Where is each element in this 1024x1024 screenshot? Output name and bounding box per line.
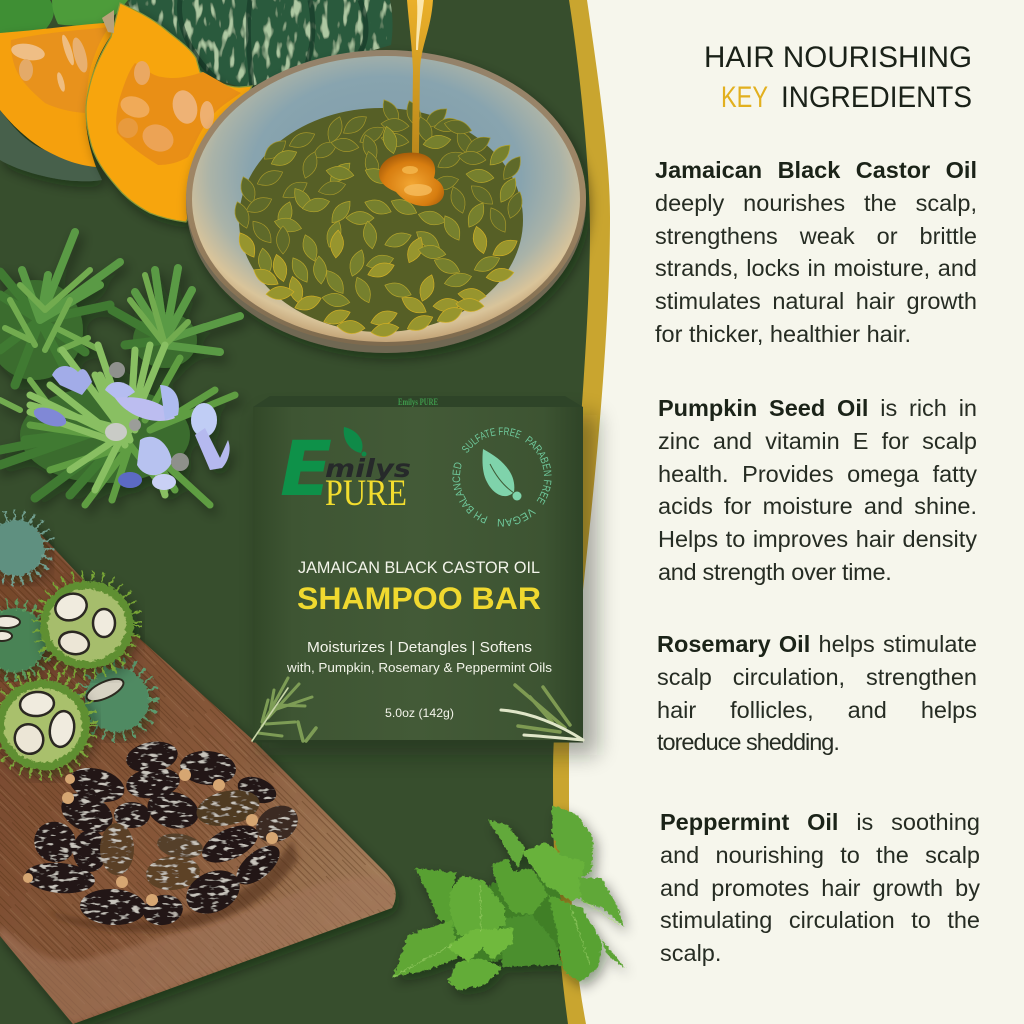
pumpkin leaves [0, 0, 128, 33]
heading [704, 41, 972, 114]
text block: Jamaican Black Castor Oil [655, 157, 977, 347]
box front [253, 407, 583, 742]
castor seed husks [0, 515, 154, 775]
illustration layer [0, 0, 632, 1024]
text block: Pumpkin Seed Oil: health. Provides omega fatty [658, 461, 977, 487]
text block: Peppermint Oil: Peppermint Oil is soothing [660, 809, 980, 835]
text block: Jamaican Black Castor Oil: strengthens weak or brittle [655, 223, 977, 249]
brand logo [280, 424, 411, 514]
product name: SHAMPOO BAR [297, 580, 541, 616]
product name: JAMAICAN BLACK CASTOR OIL [298, 558, 540, 577]
husk: back right [80, 663, 154, 737]
oil stream and pool [379, 0, 444, 206]
heading: KEY [721, 81, 768, 114]
pumpkin: left wedge [0, 23, 113, 181]
text block: Jamaican Black Castor Oil: deeply nourishes the scalp, [655, 190, 977, 216]
pumpkin: right wedge [86, 3, 252, 222]
product box [251, 396, 584, 743]
text block: Pumpkin Seed Oil: zinc and vitamin E for scalp [658, 428, 977, 454]
text block: Rosemary Oil [657, 631, 977, 755]
box rosemary left [252, 678, 316, 741]
product name: Moisturizes | Detangles | Softens [307, 640, 532, 656]
text block: Jamaican Black Castor Oil: strands, locks in moisture, and [655, 255, 977, 281]
product box shadow [262, 415, 597, 755]
text block: Pumpkin Seed Oil: acids for moisture and shine. [658, 493, 977, 519]
box lid [253, 396, 583, 407]
circular badge: VEGAN [498, 509, 536, 527]
green background panel [0, 0, 590, 1024]
circular badge: PARABEN FREE [525, 436, 552, 505]
husk: top cut [37, 575, 137, 675]
husk: lower cut [0, 675, 93, 775]
text block: Rosemary Oil: scalp circulation, strengthen [657, 664, 977, 690]
wooden cutting board [0, 531, 396, 1024]
product name [286, 558, 553, 720]
text block: Jamaican Black Castor Oil: for thicker, healthier hair. [655, 321, 911, 347]
box lid: Emilys PURE [398, 397, 438, 407]
text block: Rosemary Oil: toreduce shedding. [657, 729, 839, 755]
heading: INGREDIENTS [781, 81, 972, 114]
box rosemary right [501, 685, 583, 740]
text block: Peppermint Oil: and nourishing to the scalp [660, 842, 980, 868]
circular badge: PH BALANCED [452, 462, 488, 524]
circular badge: SULFATE FREE [462, 427, 522, 453]
pumpkin: whole green pumpkin [128, 0, 393, 88]
mint sprig [393, 805, 625, 990]
text block: Peppermint Oil [660, 809, 980, 966]
seed pile [231, 97, 526, 339]
heading: HAIR NOURISHING [704, 41, 972, 74]
text block: Peppermint Oil: and promotes hair growth by [660, 875, 980, 901]
husk: teal background [0, 515, 49, 581]
text block: Jamaican Black Castor Oil: stimulates natural hair growth [655, 288, 977, 314]
text block: Jamaican Black Castor Oil: Jamaican Black Castor Oil [655, 157, 977, 183]
text block: Pumpkin Seed Oil: and strength over time. [658, 559, 891, 585]
text block: Rosemary Oil: hair follicles, and helps [657, 697, 977, 723]
text block: Pumpkin Seed Oil: Helps to improves hair density [658, 526, 977, 552]
text block: Rosemary Oil: Rosemary Oil helps stimulate [657, 631, 977, 657]
text block: Peppermint Oil: scalp. [660, 940, 721, 966]
rosemary sprigs with flowers [0, 232, 240, 505]
husk: left [0, 604, 50, 676]
text block: Pumpkin Seed Oil: Pumpkin Seed Oil is rich in [658, 395, 977, 421]
text block: Peppermint Oil: stimulating circulation to the [660, 907, 980, 933]
product name: with, Pumpkin, Rosemary & Peppermint Oils [286, 660, 553, 675]
bowl of pumpkin seeds [186, 50, 586, 353]
product name: 5.0oz (142g) [385, 706, 454, 720]
gold curved band [0, 0, 610, 1024]
brand logo: PURE [325, 473, 407, 514]
brand logo: E [280, 424, 332, 513]
castor beans [23, 738, 305, 932]
circular badge [452, 427, 552, 527]
brand logo: milys [325, 454, 411, 483]
text block: Pumpkin Seed Oil [658, 395, 977, 585]
